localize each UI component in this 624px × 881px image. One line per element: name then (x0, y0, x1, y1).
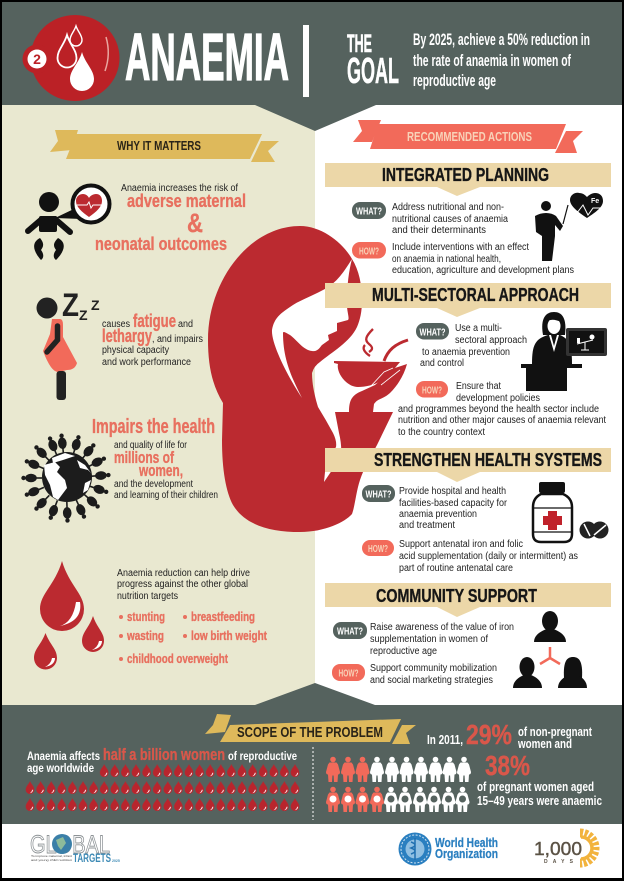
block: fatigue (36, 287, 203, 400)
section banner: COMMUNITY SUPPORT (376, 585, 538, 606)
logo: 1,000 days: 1,000 (534, 839, 582, 859)
logo: global targets: 2025 (112, 859, 120, 863)
text: adverse outcomes: adverse maternal (127, 191, 246, 211)
text: what: nutritional causes of anaemia (392, 214, 508, 225)
section banner (325, 283, 611, 317)
text: what: reproductive age (370, 646, 437, 657)
text: what (370, 622, 514, 657)
icon: blood drops (34, 561, 104, 670)
section: community support (325, 583, 611, 688)
text: fatigue: lethargy (102, 326, 152, 346)
list: nutrition targets: breastfeeding (191, 609, 255, 624)
badge: how (416, 381, 448, 398)
ribbon: scope of the problem (205, 714, 416, 744)
text: what: and control (420, 358, 464, 369)
text: what: Use a multi- (455, 323, 502, 334)
text: how (399, 539, 578, 574)
text: impairs the health: women, (138, 461, 183, 480)
logo: global targets: and young child nutrition (31, 858, 72, 862)
badge: what: WHAT? (356, 206, 382, 218)
section banner: INTEGRATED PLANNING (382, 164, 549, 185)
title: ANAEMIA (125, 20, 289, 95)
section banner (325, 448, 611, 482)
icon: globe with women around it (21, 433, 111, 523)
list: nutrition targets (119, 609, 268, 666)
badge: what (416, 323, 449, 340)
text: fatigue: fatigue (133, 311, 176, 331)
ribbon: why it matters: WHY IT MATTERS (117, 139, 201, 153)
text: how: Support antenatal iron and folic (399, 539, 523, 550)
text: what (420, 323, 527, 369)
section: strengthen health systems (325, 448, 611, 574)
badge: how: HOW? (338, 668, 358, 680)
text: 29% non-pregnant: women and (517, 737, 572, 751)
badge: how (332, 664, 365, 681)
icon: sleepy pregnant woman: Z (91, 297, 100, 313)
text: impairs the health (92, 416, 218, 501)
icon: sleepy pregnant woman: Z (62, 287, 79, 323)
text: fatigue: , and impairs (152, 334, 203, 345)
panel: why it matters background (2, 100, 315, 710)
panel: recommended actions background (315, 100, 622, 710)
badge: what (352, 202, 386, 219)
block: other nutrition targets (34, 561, 268, 670)
list: nutrition targets: childhood overweight (127, 651, 228, 666)
logo: World Health Organization (398, 832, 498, 866)
icon: speaker pointing at heart with Fe: Fe (591, 198, 599, 205)
badge: how (362, 540, 394, 556)
block: adverse outcomes (28, 183, 246, 260)
text: how: and programmes beyond the health sector include (398, 404, 599, 415)
text: global targets intro: Anaemia reduction can help drive (117, 568, 250, 579)
icon: anaemia goal badge with drops: 2 (33, 51, 41, 67)
badge: what (362, 485, 395, 502)
list: nutrition targets: low birth weight (191, 628, 268, 643)
list: nutrition targets: stunting (127, 609, 165, 624)
section: multi-sectoral approach (325, 283, 611, 438)
text: how: to the country context (398, 427, 485, 438)
header band (2, 2, 622, 131)
text: what: to anaemia prevention (422, 347, 510, 358)
text: adverse outcomes: Anaemia increases the risk of (121, 183, 238, 194)
chart: blood drop pictogram (25, 763, 300, 814)
panel: scope of the problem (2, 683, 622, 824)
illustration: woman in profile holding a bowl (208, 226, 408, 532)
badge: how: HOW? (422, 384, 442, 396)
text: 38% pregnant (477, 750, 602, 808)
badge: what: WHAT? (420, 326, 446, 338)
list: nutrition targets: wasting (126, 628, 164, 643)
text: what (392, 202, 508, 236)
logo: global targets: To improve maternal, infant (31, 854, 72, 858)
badge: how (352, 242, 386, 258)
icon: woman presenting at desk with board (521, 312, 607, 391)
text: what: Address nutritional and non- (392, 202, 504, 213)
text: fatigue: physical capacity (102, 345, 169, 356)
badge: what (333, 622, 367, 639)
text: how: Include interventions with an effect (392, 242, 529, 253)
ribbon: why it matters (50, 130, 279, 162)
text: what: Provide hospital and health (399, 486, 506, 497)
section banner (325, 163, 611, 196)
text: fatigue: and work performance (102, 357, 191, 368)
logo: 1,000 days (534, 833, 595, 865)
divider: dashed (312, 747, 314, 820)
text: how: on anaemia in national health, (392, 254, 501, 265)
text: how: Ensure that (456, 381, 501, 392)
text: what: supplementation in women of (370, 634, 488, 645)
section banner (325, 583, 611, 617)
icon: baby with heart monitor (28, 186, 110, 260)
text: how (370, 663, 497, 686)
icon: anaemia goal badge with drops (22, 15, 120, 101)
icon: hand (349, 364, 407, 412)
icon: sleepy pregnant woman (36, 287, 100, 400)
chart: non-pregnant women pictogram 29% (326, 757, 471, 782)
text: adverse outcomes (95, 183, 246, 254)
text: how: Support community mobilization (370, 663, 497, 674)
text: half a billion women: Anaemia affects (27, 749, 100, 763)
ribbon: scope of the problem: SCOPE OF THE PROBLEM (237, 724, 383, 741)
icon: three connected people (513, 611, 587, 688)
text: global targets intro (117, 568, 250, 602)
heading: the goal: GOAL (347, 50, 399, 91)
title divider bar (303, 25, 309, 97)
text: half a billion women: age worldwide (27, 761, 94, 775)
text: impairs the health: and quality of life for (114, 440, 188, 451)
logo: global targets: TARGETS (73, 851, 111, 865)
icon: bowl (334, 361, 400, 387)
text: how: acid supplementation (daily or intermittent) as (399, 551, 578, 562)
text: what: anaemia prevention (399, 509, 477, 520)
text: 29% non-pregnant: 29% (466, 719, 512, 750)
text: what: sectoral approach (455, 335, 527, 346)
text: how: education, agriculture and development plans (392, 265, 574, 276)
icon: spoon (384, 340, 408, 361)
text: 38% pregnant: 38% (485, 750, 530, 781)
text: 38% pregnant: of pregnant women aged (477, 780, 594, 794)
text: half a billion women (27, 745, 297, 775)
logo: World Health Organization: Organization (435, 846, 498, 861)
text: 29% non-pregnant: of non-pregnant (518, 725, 593, 739)
text: impairs the health: Impairs the health (92, 416, 215, 438)
text: how: and social marketing strategies (370, 675, 493, 686)
text: half a billion women: half a billion women (103, 745, 225, 764)
badge: how: HOW? (359, 246, 379, 258)
text: 29% non-pregnant (427, 719, 593, 751)
badge: what: WHAT? (337, 626, 363, 638)
text: how: part of routine antenatal care (399, 563, 513, 574)
text: how: development policies (456, 393, 540, 404)
icon: steam (364, 329, 373, 356)
text: what: and treatment (399, 520, 455, 531)
logo: World Health Organization: World Health (435, 835, 498, 850)
text: goal statement (413, 30, 590, 90)
text: global targets intro: progress against the other global (117, 579, 248, 590)
text: half a billion women: of reproductive (228, 749, 297, 763)
icon: pill bottle and tablets (533, 482, 608, 542)
text: adverse outcomes: neonatal outcomes (95, 234, 227, 254)
text: what: and their determinants (392, 225, 486, 236)
ribbon: recommended actions (353, 120, 583, 153)
text: what: facilities-based capacity for (399, 498, 508, 509)
chart: pregnant women pictogram 38% (326, 787, 470, 812)
text: impairs the health: and the development (114, 479, 193, 490)
text: fatigue: and (178, 319, 193, 330)
heading: the goal: THE (347, 30, 372, 58)
text: what: Raise awareness of the value of iron (370, 622, 514, 633)
badge: how: HOW? (368, 543, 388, 555)
text: adverse outcomes: & (187, 208, 203, 238)
text: fatigue (102, 311, 203, 368)
finger contour lines (370, 368, 400, 387)
icon: sleepy pregnant woman: Z (79, 307, 88, 323)
footer (2, 824, 622, 878)
text: how (398, 381, 606, 438)
icon: speaker pointing at heart with Fe (535, 193, 603, 261)
text: how (392, 242, 574, 276)
section: integrated planning (325, 163, 611, 276)
logo: 1,000 days: DAYS (544, 859, 574, 865)
badge: what: WHAT? (366, 488, 392, 500)
block: health and quality of life (21, 416, 218, 523)
text: fatigue: causes (102, 319, 130, 330)
text: impairs the health: millions of (114, 448, 174, 467)
text: global targets intro: nutrition targets (117, 591, 178, 602)
heading: the goal (347, 30, 399, 91)
logo: global targets: GLOBAL (30, 831, 110, 859)
text: 29% non-pregnant: In 2011, (427, 733, 463, 747)
text: goal statement: reproductive age (413, 71, 496, 90)
ribbon: recommended actions: RECOMMENDED ACTIONS (407, 130, 532, 144)
text: what (399, 486, 508, 531)
text: impairs the health: and learning of their children (114, 490, 218, 501)
